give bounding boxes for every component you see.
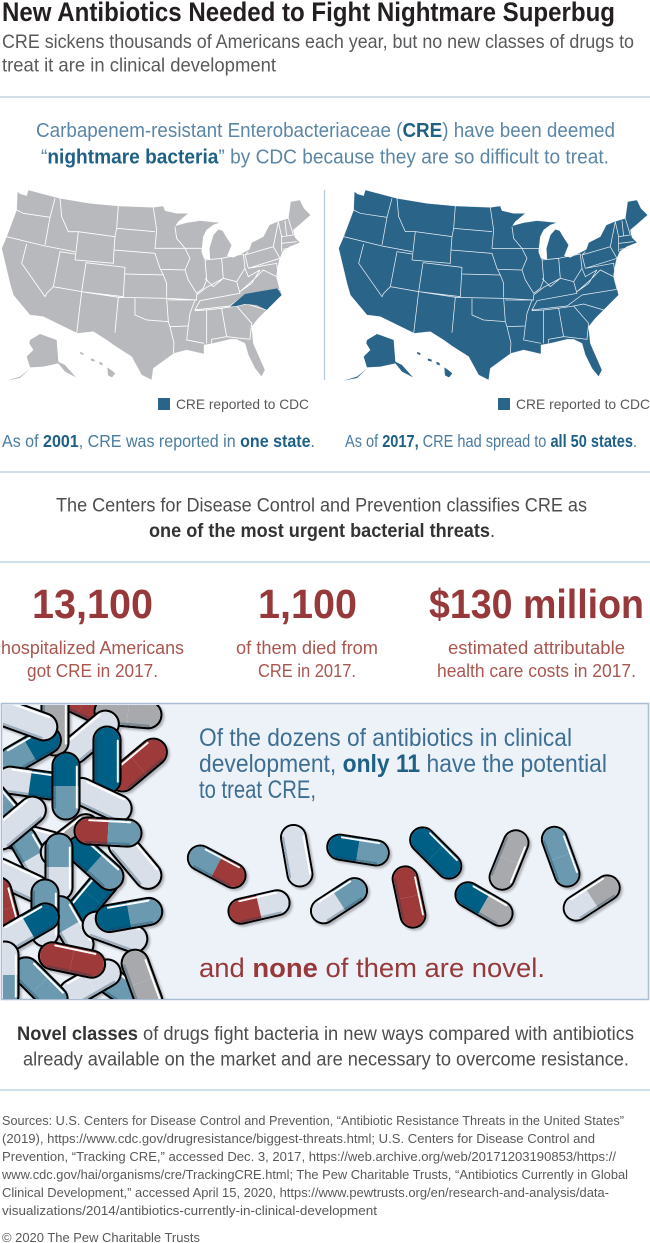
sources: Sources: U.S. Centers for Disease Control and Prevention, “Antibiotic Resistance Threats in the United States” xyxy=(2,1113,624,1128)
caption 2001: As of 2001, CRE was reported in one state. xyxy=(2,431,315,451)
intro statement xyxy=(36,120,615,168)
stat: hospitalized: hospitalized Americans xyxy=(1,638,184,658)
panel text: only 11: to treat CRE, xyxy=(199,776,316,804)
stat: deaths: CRE in 2017. xyxy=(258,661,356,681)
legend right: CRE reported to CDC xyxy=(516,396,650,412)
sources xyxy=(1,1113,628,1218)
sources: www.cdc.gov/hai/organisms/cre/TrackingCRE.html; The Pew Charitable Trusts, “Antibiotics Currently in Global xyxy=(1,1167,628,1182)
subtitle: treat it are in clinical development xyxy=(2,54,277,76)
stat: deaths: of them died from xyxy=(236,638,378,658)
urgent threat statement: The Centers for Disease Control and Prevention classifies CRE as xyxy=(56,496,587,516)
intro statement: Carbapenem-resistant Enterobacteriaceae (CRE) have been deemed xyxy=(36,120,615,142)
panel text: only 11: Of the dozens of antibiotics in clinical xyxy=(199,724,572,752)
urgent threat statement xyxy=(56,496,587,542)
caption 2017: As of 2017, CRE had spread to all 50 states. xyxy=(345,431,637,451)
stat: costs: estimated attributable xyxy=(448,638,625,658)
stat: costs xyxy=(429,581,644,681)
stat: hospitalized xyxy=(1,581,184,681)
sources: Prevention, “Tracking CRE,” accessed Dec. 3, 2017, https://web.archive.org/web/20171203190853/https:// xyxy=(2,1149,616,1164)
sources: visualizations/2014/antibiotics-currently-in-clinical-development xyxy=(2,1203,377,1218)
panel text: none novel: and none of them are novel. xyxy=(199,953,545,983)
icon: 11 pills xyxy=(183,822,625,930)
panel text: only 11: development, only 11 have the potential xyxy=(199,750,607,778)
sources: Clinical Development,” accessed April 15, 2020, https://www.pewtrusts.org/en/research-and-analysis/data- xyxy=(2,1185,609,1200)
panel: antibiotics pipeline xyxy=(0,702,650,1000)
subtitle xyxy=(2,31,634,76)
stat: costs: health care costs in 2017. xyxy=(437,661,636,681)
panel text: only 11 xyxy=(199,724,607,804)
urgent threat statement: one of the most urgent bacterial threats. xyxy=(149,521,495,542)
stat: deaths xyxy=(236,581,378,681)
map: 2017, all states xyxy=(339,190,648,381)
map: 2001, one state xyxy=(2,190,311,381)
intro statement: “nightmare bacteria” by CDC because they are so difficult to treat. xyxy=(41,146,609,168)
stat: deaths: 1,100 xyxy=(258,581,357,627)
North Carolina highlighted xyxy=(230,288,282,310)
icon: pile of pills xyxy=(3,705,171,999)
novel classes note: already available on the market and are necessary to overcome resistance. xyxy=(23,1050,629,1070)
novel classes note xyxy=(17,1024,634,1070)
legend left: CRE reported to CDC xyxy=(176,396,309,412)
stat: hospitalized: 13,100 xyxy=(32,581,153,627)
sources: (2019), https://www.cdc.gov/drugresistance/biggest-threats.html; U.S. Centers for Disease Control and xyxy=(2,1131,595,1146)
stat: hospitalized: got CRE in 2017. xyxy=(27,661,158,681)
novel classes note: Novel classes of drugs fight bacteria in new ways compared with antibiotics xyxy=(17,1024,634,1045)
